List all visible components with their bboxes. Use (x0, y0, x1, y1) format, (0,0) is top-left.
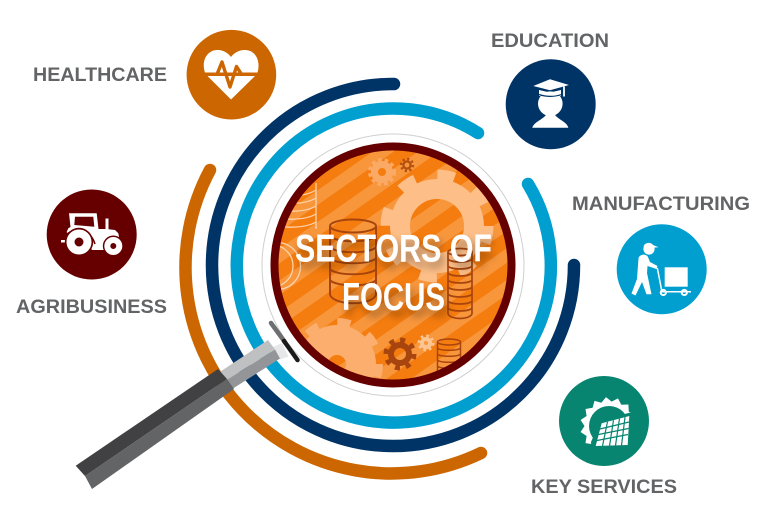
arc: navy ring (212, 84, 574, 446)
title text: SECTORS OF (295, 228, 492, 270)
icon: education graduate (506, 59, 596, 149)
disc illustrations (280, 158, 494, 378)
large gear (387, 176, 487, 276)
label: education: EDUCATION (491, 31, 609, 52)
magnifier lens (278, 150, 508, 380)
icon: healthcare heart (187, 30, 276, 120)
arc: orange outer ring (185, 170, 481, 473)
label: healthcare: HEALTHCARE (33, 65, 167, 86)
title text (295, 228, 492, 319)
maroon rim (274, 146, 512, 384)
small brown gear top (401, 159, 413, 171)
pale coin stack (284, 183, 317, 229)
pale rings left (280, 242, 302, 290)
title text: FOCUS (342, 276, 445, 319)
icon: manufacturing worker (617, 224, 707, 314)
label: manufacturing: MANUFACTURING (572, 194, 750, 215)
brown gear bottom (386, 340, 414, 368)
small pale gear (370, 160, 394, 184)
thin grey ring (262, 134, 524, 396)
ring lines (271, 323, 284, 342)
bottom-left gear (304, 318, 383, 378)
coin stack left (330, 220, 376, 303)
label: agribusiness: AGRIBUSINESS (16, 297, 167, 318)
arc: light blue ring (237, 109, 551, 423)
small pale gear bottom (419, 336, 433, 350)
icon: key services solar (559, 376, 649, 466)
icon: agribusiness tractor (47, 190, 137, 280)
label: key services: KEY SERVICES (531, 477, 677, 498)
magnifier handle (76, 323, 298, 489)
coin stack right (448, 248, 472, 318)
coin stack bottom (438, 339, 460, 372)
